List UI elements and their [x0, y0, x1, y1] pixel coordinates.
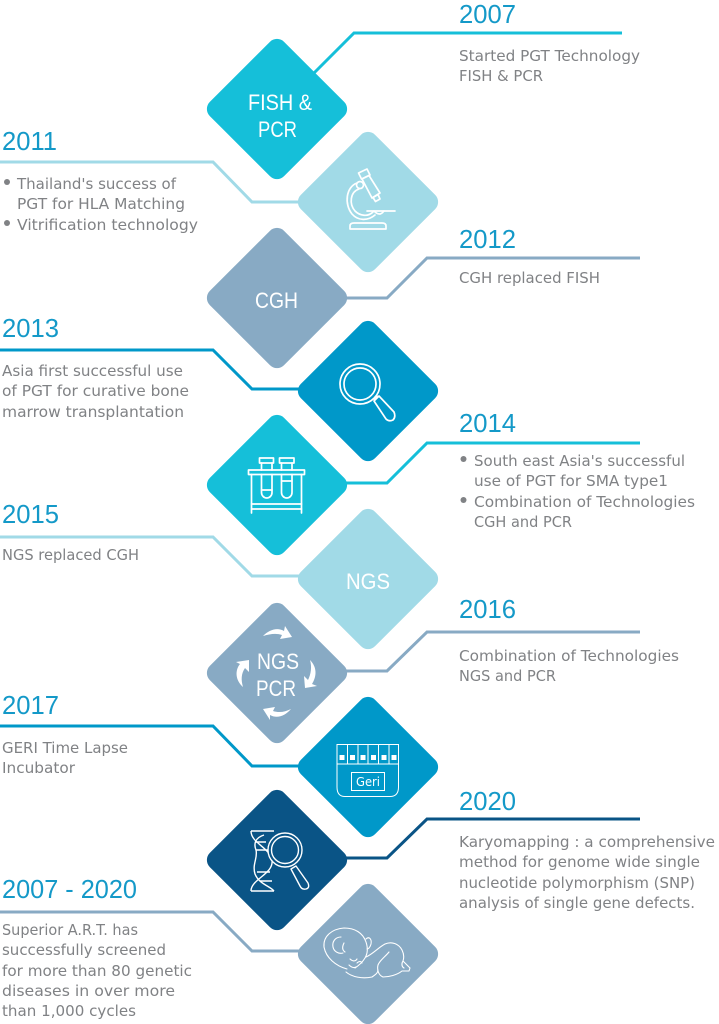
text: 2014 bullets: South east Asia's successful: [474, 452, 685, 470]
diamond: FISH & PCR: [203, 35, 351, 183]
entry: 2015: [0, 499, 300, 576]
text: 2020 description: [459, 833, 715, 912]
entry: 2014: [340, 408, 695, 531]
text: 2011 bullets: Thailand's success of: [16, 175, 177, 193]
connector: 2013: [0, 350, 300, 389]
text: 2007 description: Started PGT Technology: [459, 47, 640, 65]
text: 2016 description: [459, 647, 679, 685]
connector: 2014: [340, 443, 640, 483]
diamond: magnifier: [294, 317, 442, 465]
text: 2007 - 2020 description: Superior A.R.T. has: [2, 921, 138, 939]
icon: microscope: [347, 169, 395, 229]
year: 2015: 2015: [2, 499, 59, 529]
entry: 2011: [0, 126, 300, 234]
connector: 2012: [340, 258, 640, 298]
connector: 2007: [312, 33, 622, 75]
entry: 2013: [0, 313, 300, 421]
icon: Geri incubator: [337, 744, 398, 796]
text: 2016 description: Combination of Technologies: [459, 647, 679, 665]
diamond: NGS PCR cycle: NGS: [257, 649, 299, 674]
diamond: DNA and magnifier: [203, 786, 351, 934]
text: 2007 - 2020 description: [2, 921, 192, 1020]
text: 2007 - 2020 description: than 1,000 cycles: [2, 1002, 136, 1020]
text: 2007 description: [459, 47, 640, 85]
diamond: Geri incubator: [294, 693, 442, 841]
year: 2007 - 2020: 2007 - 2020: [2, 874, 137, 904]
diamond: NGS PCR cycle: PCR: [256, 676, 296, 701]
year: 2017: 2017: [2, 690, 59, 720]
connector: 2020: [340, 819, 640, 858]
text: 2020 description: nucleotide polymorphism (SNP): [459, 874, 695, 892]
diamond: FISH & PCR: PCR: [258, 117, 297, 142]
text: 2020 description: method for genome wide single: [459, 853, 700, 871]
entry: 2007: [312, 0, 640, 85]
text: 2011 bullets: PGT for HLA Matching: [17, 195, 185, 213]
text: 2007 - 2020 description: for more than 80 genetic: [2, 962, 192, 980]
entry: 2017: [0, 690, 300, 777]
icon: magnifying glass: [340, 364, 395, 421]
connector: 2011: [0, 162, 300, 202]
text: 2007 - 2020 description: diseases in over more: [2, 982, 175, 1000]
diamond: baby: [294, 880, 442, 1024]
entry: 2007 - 2020: [0, 874, 300, 1020]
entry: 2012: [340, 224, 640, 298]
text: 2013 description: marrow transplantation: [2, 403, 184, 421]
text: 2014 bullets: [460, 452, 695, 531]
text: 2016 description: NGS and PCR: [459, 667, 556, 685]
diamond: NGS: NGS: [346, 569, 390, 594]
icon: sleeping baby: [324, 928, 410, 978]
text: 2020 description: Karyomapping : a comprehensive: [459, 833, 715, 851]
diamond: microscope: [294, 128, 442, 276]
diamond: CGH: CGH: [255, 288, 298, 313]
text: 2017 description: GERI Time Lapse: [2, 739, 128, 757]
text: 2011 bullets: Vitrification technology: [17, 216, 198, 234]
diamond: NGS: [294, 505, 442, 653]
connector: 2007 - 2020: [0, 912, 300, 951]
connector: 2015: [0, 537, 300, 576]
text: 2007 - 2020 description: successfully screened: [2, 941, 166, 959]
text: 2011 bullets: [4, 175, 198, 234]
text: 2017 description: [2, 739, 128, 777]
text: 2013 description: [2, 362, 189, 421]
text: 2017 description: Incubator: [2, 759, 76, 777]
diamond: NGS PCR cycle: [203, 599, 351, 747]
entry: 2020: [340, 786, 715, 912]
connector: 2017: [0, 726, 300, 766]
text: 2014 bullets: CGH and PCR: [474, 513, 572, 531]
connector: 2016: [340, 632, 640, 671]
year: 2011: 2011: [2, 126, 57, 156]
icon: cycle arrows: [236, 626, 317, 720]
text: 2015 description: NGS replaced CGH: [2, 546, 139, 564]
text: 2020 description: analysis of single gene defects.: [459, 894, 695, 912]
icon: Geri incubator: Geri: [356, 775, 380, 789]
year: 2014: 2014: [459, 408, 516, 438]
entry: 2016: [340, 594, 679, 685]
text: 2013 description: of PGT for curative bone: [2, 382, 189, 400]
text: 2007 description: FISH & PCR: [459, 67, 543, 85]
text: 2014 bullets: Combination of Technologies: [474, 493, 695, 511]
year: 2016: 2016: [459, 594, 516, 624]
text: 2013 description: Asia first successful use: [2, 362, 183, 380]
text: 2014 bullets: use of PGT for SMA type1: [474, 472, 668, 490]
icon: DNA with magnifier: [251, 831, 309, 891]
diamond: CGH: [203, 224, 351, 372]
year: 2012: 2012: [459, 224, 516, 254]
diamond: test tubes: [203, 411, 351, 559]
diamond: FISH & PCR: FISH &: [248, 90, 312, 115]
text: 2012 description: CGH replaced FISH: [459, 269, 600, 287]
year: 2020: 2020: [459, 786, 516, 816]
icon: test tube rack: [248, 458, 304, 513]
year: 2013: 2013: [2, 313, 59, 343]
